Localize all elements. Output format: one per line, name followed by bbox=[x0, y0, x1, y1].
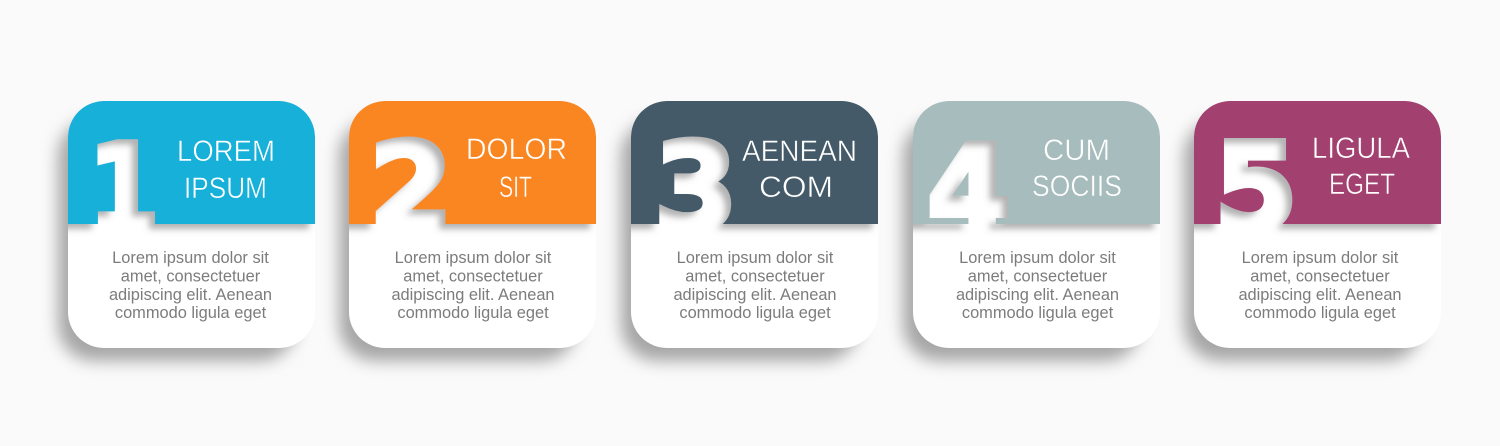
heading 3 bbox=[742, 135, 857, 204]
heading 3: AENEAN bbox=[742, 135, 857, 168]
card body 5 bbox=[1194, 101, 1441, 348]
description 3: amet, consectetuer bbox=[685, 268, 825, 286]
heading 4: CUM bbox=[1043, 134, 1110, 167]
card body 3 bbox=[631, 101, 878, 348]
panel: step 5 bbox=[1184, 101, 1441, 361]
heading 2: DOLOR bbox=[466, 133, 567, 166]
card body 4 bbox=[913, 101, 1160, 348]
header with number 1 cut-out bbox=[68, 101, 315, 224]
card body 1 bbox=[68, 101, 315, 348]
header with number 4 cut-out bbox=[913, 101, 1160, 224]
description 5 bbox=[1238, 249, 1402, 322]
description 3: adipiscing elit. Aenean bbox=[673, 286, 837, 304]
description 2 bbox=[391, 249, 555, 322]
header with number 2 cut-out bbox=[349, 101, 596, 224]
card shadow 4 bbox=[903, 120, 1141, 361]
description 1: commodo ligula eget bbox=[115, 304, 267, 322]
description 4 bbox=[956, 249, 1119, 322]
heading 1 bbox=[177, 135, 275, 205]
header with number 3 cut-out bbox=[631, 101, 878, 224]
description 2: adipiscing elit. Aenean bbox=[391, 286, 555, 304]
description 4: Lorem ipsum dolor sit bbox=[959, 249, 1116, 267]
panel: step 1 bbox=[58, 101, 315, 361]
heading 5: EGET bbox=[1329, 168, 1395, 201]
description 5: amet, consectetuer bbox=[1250, 268, 1390, 286]
heading 2: SIT bbox=[499, 171, 532, 204]
description 5: Lorem ipsum dolor sit bbox=[1242, 249, 1399, 267]
card shadow 3 bbox=[621, 120, 859, 361]
heading 2 bbox=[466, 133, 567, 204]
panel: step 4 bbox=[903, 101, 1160, 361]
description 4: amet, consectetuer bbox=[968, 268, 1108, 286]
description 1 bbox=[109, 249, 272, 322]
card shadow 5 bbox=[1184, 120, 1422, 361]
description 2: commodo ligula eget bbox=[397, 304, 549, 322]
description 4: adipiscing elit. Aenean bbox=[956, 286, 1119, 304]
heading 1: IPSUM bbox=[184, 172, 267, 205]
description 1: Lorem ipsum dolor sit bbox=[112, 249, 269, 267]
heading 4: SOCIIS bbox=[1032, 170, 1122, 203]
heading 1: LOREM bbox=[177, 135, 275, 168]
description 2: amet, consectetuer bbox=[403, 268, 543, 286]
panel: step 2 bbox=[339, 101, 596, 361]
panel: step 3 bbox=[621, 101, 878, 361]
description 3: Lorem ipsum dolor sit bbox=[677, 249, 834, 267]
heading 5 bbox=[1312, 132, 1410, 201]
heading 4 bbox=[1032, 134, 1122, 203]
description 1: adipiscing elit. Aenean bbox=[109, 286, 272, 304]
card shadow 1 bbox=[58, 120, 296, 361]
description 1: amet, consectetuer bbox=[121, 268, 261, 286]
description 3 bbox=[673, 249, 837, 322]
card shadow 2 bbox=[339, 120, 577, 361]
description 2: Lorem ipsum dolor sit bbox=[395, 249, 552, 267]
card body 2 bbox=[349, 101, 596, 348]
heading 3: COM bbox=[759, 171, 833, 204]
heading 5: LIGULA bbox=[1312, 132, 1410, 165]
description 4: commodo ligula eget bbox=[962, 304, 1114, 322]
description 5: commodo ligula eget bbox=[1244, 304, 1396, 322]
description 3: commodo ligula eget bbox=[679, 304, 831, 322]
description 5: adipiscing elit. Aenean bbox=[1238, 286, 1402, 304]
header with number 5 cut-out bbox=[1194, 101, 1441, 224]
